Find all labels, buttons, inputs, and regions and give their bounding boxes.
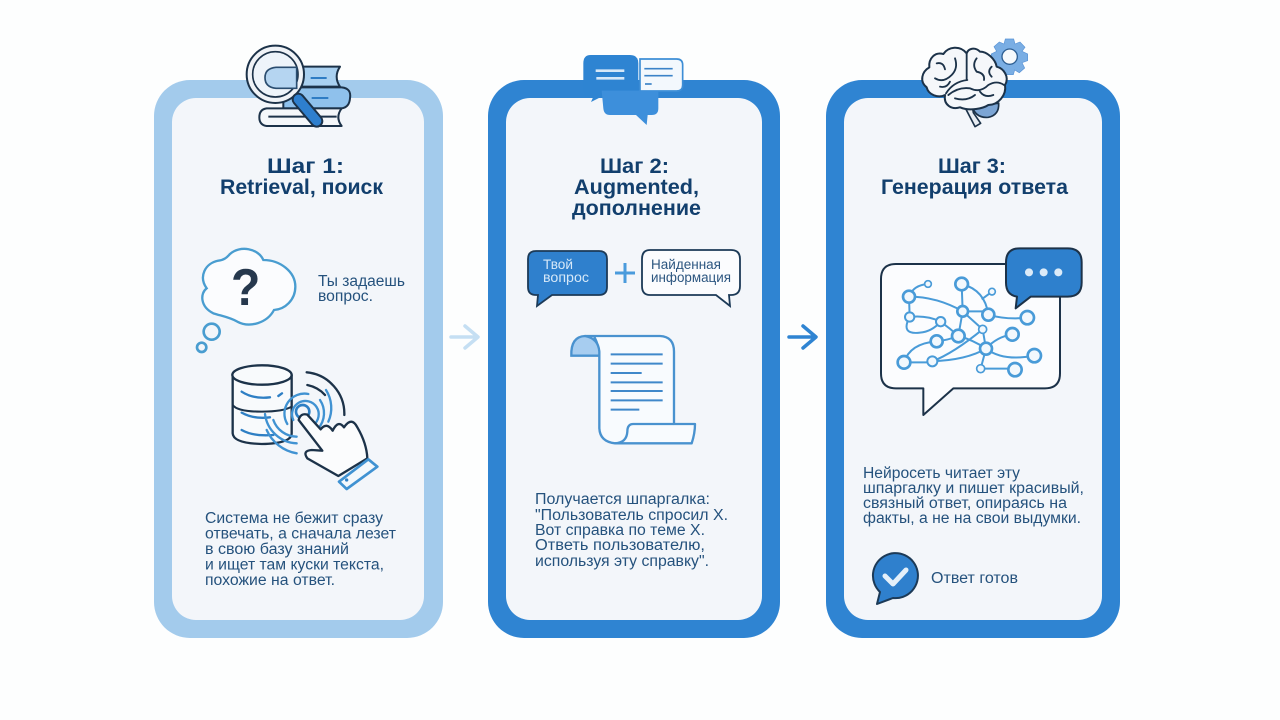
- panel: step 3 generation: [826, 39, 1120, 638]
- arrow: step 1 to step 2: [451, 326, 478, 348]
- icon: question thought cloud: [197, 249, 295, 352]
- card frame 3: [826, 80, 1120, 638]
- text: you ask a question: [318, 273, 405, 305]
- heading 3: Шаг 3:: [938, 154, 1006, 178]
- text: system searches knowledge base: похожие на ответ.: [205, 572, 335, 589]
- bubble: your question: вопрос: [543, 270, 589, 285]
- icon: neural network speech bubble: [881, 248, 1082, 415]
- text: system searches knowledge base: [205, 510, 396, 589]
- bubble: your question: Твой: [543, 257, 573, 272]
- heading 3: Генерация ответа: [881, 175, 1069, 199]
- panel: step 2 augmented: [488, 55, 780, 638]
- bubble: your question: [528, 251, 607, 306]
- text: you ask a question: Ты задаешь: [318, 273, 405, 290]
- icon: answer ready check: [873, 553, 918, 604]
- bubble: found information: Найденная: [651, 257, 721, 272]
- typing bubble: [1006, 248, 1082, 308]
- question mark: ?: [231, 258, 260, 316]
- icon: plus: [615, 263, 635, 283]
- icon: scroll document: [571, 336, 695, 443]
- arrow: step 2 to step 3: [789, 326, 816, 348]
- heading 2: дополнение: [572, 196, 701, 220]
- network edges: [904, 284, 1034, 369]
- heading 2: Шаг 2:: [600, 154, 669, 178]
- card frame 1: [154, 80, 443, 638]
- text: network writes answer: [863, 465, 1084, 527]
- icon: database and pointing hand: [232, 365, 377, 489]
- text: cheat sheet: "Пользователь спросил X.: [535, 507, 728, 524]
- text: network writes answer: шпаргалку и пишет красивый,: [863, 480, 1084, 497]
- bubble: found information: [642, 250, 740, 306]
- card body 1: [172, 98, 424, 620]
- text: system searches knowledge base: Система не бежит сразу: [205, 510, 383, 527]
- text: network writes answer: Нейросеть читает эту: [863, 465, 1020, 482]
- network nodes: [898, 278, 1041, 376]
- text: you ask a question: вопрос.: [318, 288, 373, 305]
- text: cheat sheet: [535, 491, 728, 570]
- heading 3: [881, 154, 1069, 199]
- text: network writes answer: факты, а не на свои выдумки.: [863, 510, 1081, 527]
- card body 2: [506, 98, 762, 620]
- icon: chat bubbles: [583, 55, 683, 125]
- text: system searches knowledge base: отвечать, а сначала лезет: [205, 526, 396, 542]
- text: network writes answer: связный ответ, опираясь на: [863, 495, 1067, 512]
- text: system searches knowledge base: в свою базу знаний: [205, 541, 349, 558]
- card frame 2: [488, 80, 780, 638]
- heading 1: Шаг 1:: [267, 154, 344, 178]
- text: cheat sheet: Ответь пользователю,: [535, 537, 705, 554]
- icon: magnifier over books: [247, 46, 350, 126]
- heading 2: Augmented,: [574, 175, 699, 199]
- heading 1: [220, 154, 383, 199]
- text: cheat sheet: Получается шпаргалка:: [535, 491, 710, 508]
- panel: step 1 retrieval: [154, 46, 443, 638]
- heading 1: Retrieval, поиск: [220, 175, 383, 199]
- heading 2: [572, 154, 701, 220]
- icon: brain and gear: [922, 39, 1028, 127]
- card body 3: [844, 98, 1102, 620]
- text: cheat sheet: используя эту справку".: [535, 553, 709, 570]
- text: answer ready: Ответ готов: [931, 570, 1018, 587]
- text: cheat sheet: Вот справка по теме X.: [535, 522, 705, 539]
- bubble: found information: информация: [651, 270, 731, 285]
- text: system searches knowledge base: и ищет там куски текста,: [205, 556, 384, 574]
